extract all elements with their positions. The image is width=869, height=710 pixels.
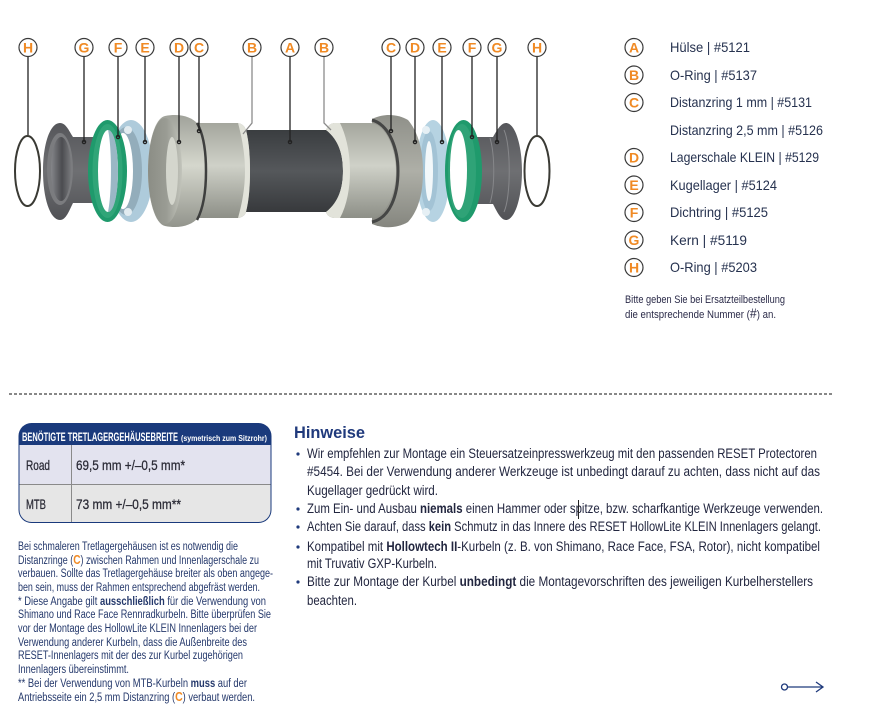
footnote paragraph: ben sein, muss der Rahmen entsprechend abgefräst werden.	[18, 582, 260, 594]
footnote paragraph	[18, 541, 273, 704]
table rows	[20, 445, 270, 522]
parts legend: Lagerschale KLEIN | #5129	[670, 149, 819, 165]
width table	[18, 423, 272, 523]
callout letters: E	[437, 40, 447, 56]
width table: MTB	[26, 496, 46, 512]
callout letters: B	[247, 40, 257, 56]
parts legend: Kugellager | #5124	[670, 177, 777, 193]
part: left core G	[43, 123, 99, 220]
width table: Road	[26, 457, 50, 473]
parts legend: B	[629, 67, 639, 83]
footnote paragraph: Innenlagers übereinstimmt.	[18, 664, 129, 676]
exploded bottom bracket diagram	[15, 38, 550, 227]
parts legend: D	[629, 150, 639, 166]
callout letters: A	[285, 40, 295, 56]
callout letters: C	[386, 40, 396, 56]
parts legend: O-Ring | #5137	[670, 67, 757, 83]
notes list: Kompatibel mit Hollowtech II-Kurbeln (z. B. von Shimano, Race Face, FSA, Rotor), nicht kompatibel	[307, 539, 820, 554]
part: right ball bearing E	[416, 120, 450, 222]
part: right seal ring F	[445, 120, 482, 222]
notes list	[296, 446, 823, 608]
heading: Hinweise: Hinweise	[294, 423, 365, 442]
parts legend: C	[629, 94, 639, 110]
part: right O-ring H	[524, 136, 550, 206]
footnote paragraph: * Diese Angabe gilt ausschließlich für die Verwendung von	[18, 596, 266, 608]
callout letters: F	[468, 40, 477, 56]
notes list: beachten.	[307, 593, 357, 608]
callout letters: G	[492, 40, 503, 56]
callout letters: H	[532, 40, 542, 56]
parts legend: O-Ring | #5203	[670, 259, 757, 275]
part: right bearing cup D	[372, 115, 423, 227]
part: left spacer ring C and body	[194, 123, 250, 218]
part: right body and B ring	[326, 123, 396, 218]
order note: Bitte geben Sie bei Ersatzteilbestellung	[625, 294, 785, 306]
callout letters	[19, 38, 546, 56]
footnote paragraph: Distanzringe (C) zwischen Rahmen und Innenlagerschale zu	[18, 552, 259, 567]
width table: BENÖTIGTE TRETLAGERGEHÄUSEBREITE	[22, 429, 178, 444]
part: sleeve A	[236, 130, 343, 212]
parts legend: Distanzring 1 mm | #5131	[670, 94, 812, 110]
leader lines and callouts	[28, 56, 537, 144]
callout letters: E	[140, 40, 150, 56]
footnote paragraph: Antriebsseite ein 2,5 mm Distanzring (C) verbaut werden.	[18, 689, 255, 704]
footnote paragraph: Bei schmaleren Tretlagergehäusen ist es notwendig die	[18, 541, 238, 553]
notes list: mit Truvativ GXP-Kurbeln.	[307, 556, 437, 571]
callout letters: G	[79, 40, 90, 56]
parts legend: Kern | #5119	[670, 232, 747, 248]
parts legend: H	[629, 260, 639, 276]
parts legend: A	[629, 40, 639, 56]
width table: (symetrisch zum Sitzrohr)	[181, 434, 267, 443]
parts legend: Hülse | #5121	[670, 39, 750, 55]
footnote paragraph: vor der Montage des HollowLite KLEIN Innenlagers bei der	[18, 623, 257, 635]
width table: 73 mm +/–0,5 mm**	[76, 496, 181, 512]
footnote paragraph: RESET-Innenlagers mit der des zur Kurbel zugehörigen	[18, 650, 243, 662]
part: left ball bearing E	[109, 120, 153, 222]
order note: die entsprechende Nummer (#) an.	[625, 305, 776, 321]
callout letters: F	[114, 40, 123, 56]
callout letters: C	[194, 40, 204, 56]
part: right core G	[468, 123, 522, 220]
parts legend: E	[629, 177, 639, 193]
notes list: Bitte zur Montage der Kurbel unbedingt die Montagevorschriften des jeweiligen Kurbelherstellers	[307, 574, 813, 589]
arrow: next page	[782, 682, 823, 692]
footnote paragraph: ** Bei der Verwendung von MTB-Kurbeln muss auf der	[18, 678, 247, 690]
part: left O-ring H	[15, 136, 40, 206]
order note	[625, 294, 785, 321]
footnote paragraph: Shimano und Race Face Rennradkurbeln. Bitte überprüfen Sie	[18, 609, 271, 621]
notes list: Kugellager gedrückt wird.	[307, 483, 438, 498]
parts legend: Dichtring | #5125	[670, 204, 768, 220]
parts legend	[625, 38, 823, 276]
callout letters: D	[410, 40, 420, 56]
footnote paragraph: Verwendung anderer Kurbeln, dass die Außenbreite des	[18, 637, 247, 649]
callout letters: D	[174, 40, 184, 56]
width table: 69,5 mm +/–0,5 mm*	[76, 457, 185, 473]
callout letters: B	[319, 40, 329, 56]
part: left bearing cup D	[148, 115, 206, 227]
parts legend: F	[630, 204, 639, 220]
parts legend: G	[629, 232, 640, 248]
callout letters: H	[23, 40, 33, 56]
footnote paragraph: verbauen. Sollte das Tretlagergehäuse breiter als oben angege-	[18, 568, 273, 580]
parts legend: Distanzring 2,5 mm | #5126	[670, 122, 823, 138]
part: left seal ring F	[88, 120, 127, 222]
